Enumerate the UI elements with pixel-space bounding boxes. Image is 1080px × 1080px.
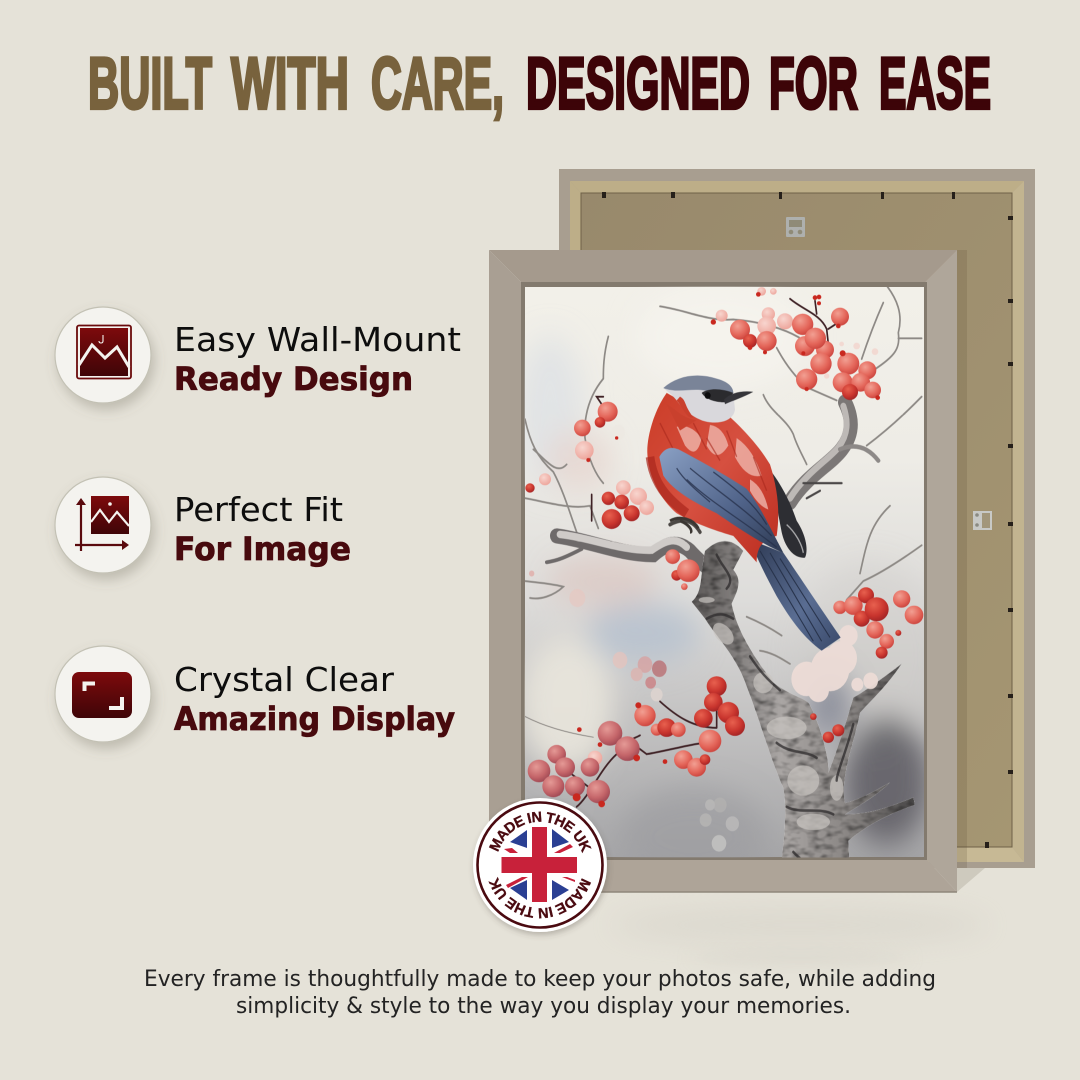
badge: made in the uk [472,798,610,938]
left branch [545,519,704,572]
footer text: simplicity & style to the way you display your memories. [236,994,851,1019]
text: ready design: Ready Design [174,360,413,398]
painting background [525,287,924,857]
text: for image: For Image [174,530,351,568]
front frame [489,250,957,939]
berries: upper left [574,402,618,460]
faded blooms [529,570,739,852]
badge text: top: MADE IN THE UK [488,811,592,854]
berries: right [833,587,923,659]
text: crystal clear: Crystal Clear [174,660,394,699]
back of frame [559,169,1035,892]
far wing tip [770,470,807,558]
hanger: right [973,511,992,530]
title: FOR [769,44,858,124]
hanger: top [786,217,805,237]
text: easy wall-mount: Easy Wall-Mount [174,320,461,359]
text: perfect fit: Perfect Fit [174,490,343,529]
painting: bird on a berry branch [524,286,924,858]
floor shadow [610,905,990,966]
footer text: Every frame is thoughtfully made to keep your photos safe, while adding [144,967,936,992]
icon: framed mountain with hook [55,307,151,403]
blossoms [791,625,878,702]
wing [659,448,783,553]
beak [724,391,753,404]
clips [602,192,1013,848]
feature: perfect fit [55,477,351,573]
hardboard backing [581,193,1012,847]
dark berry stems [560,299,840,807]
feature: easy wall-mount [55,307,461,403]
title: CARE, [371,44,504,124]
berries: lower left [528,721,640,803]
feet [670,518,698,532]
title [88,44,991,124]
berries: middle left [525,473,654,529]
icon: union flag [502,827,577,902]
bird [647,376,841,651]
icon: rounded display with corners [55,646,151,742]
thin twigs [525,286,922,737]
title: EASE [879,44,991,124]
title: WITH [231,44,349,124]
title: BUILT [88,44,212,124]
berries: lower centre [634,676,844,777]
berries [525,287,923,807]
text: amazing display: Amazing Display [174,700,455,738]
shadow of front frame [957,250,967,868]
body [647,393,778,562]
footer text [144,967,936,1019]
tail [757,544,841,651]
upper branch [790,402,878,502]
feature: crystal clear [55,646,455,742]
icon: image with dimension arrows [55,477,151,573]
title: DESIGNED [526,44,750,124]
head [664,388,735,423]
berries: top cluster [716,287,881,400]
berries: centre [665,549,700,590]
inner frame lip [521,282,927,860]
trunk [692,540,915,858]
badge text: bottom: MADE IN THE UK [488,876,592,919]
